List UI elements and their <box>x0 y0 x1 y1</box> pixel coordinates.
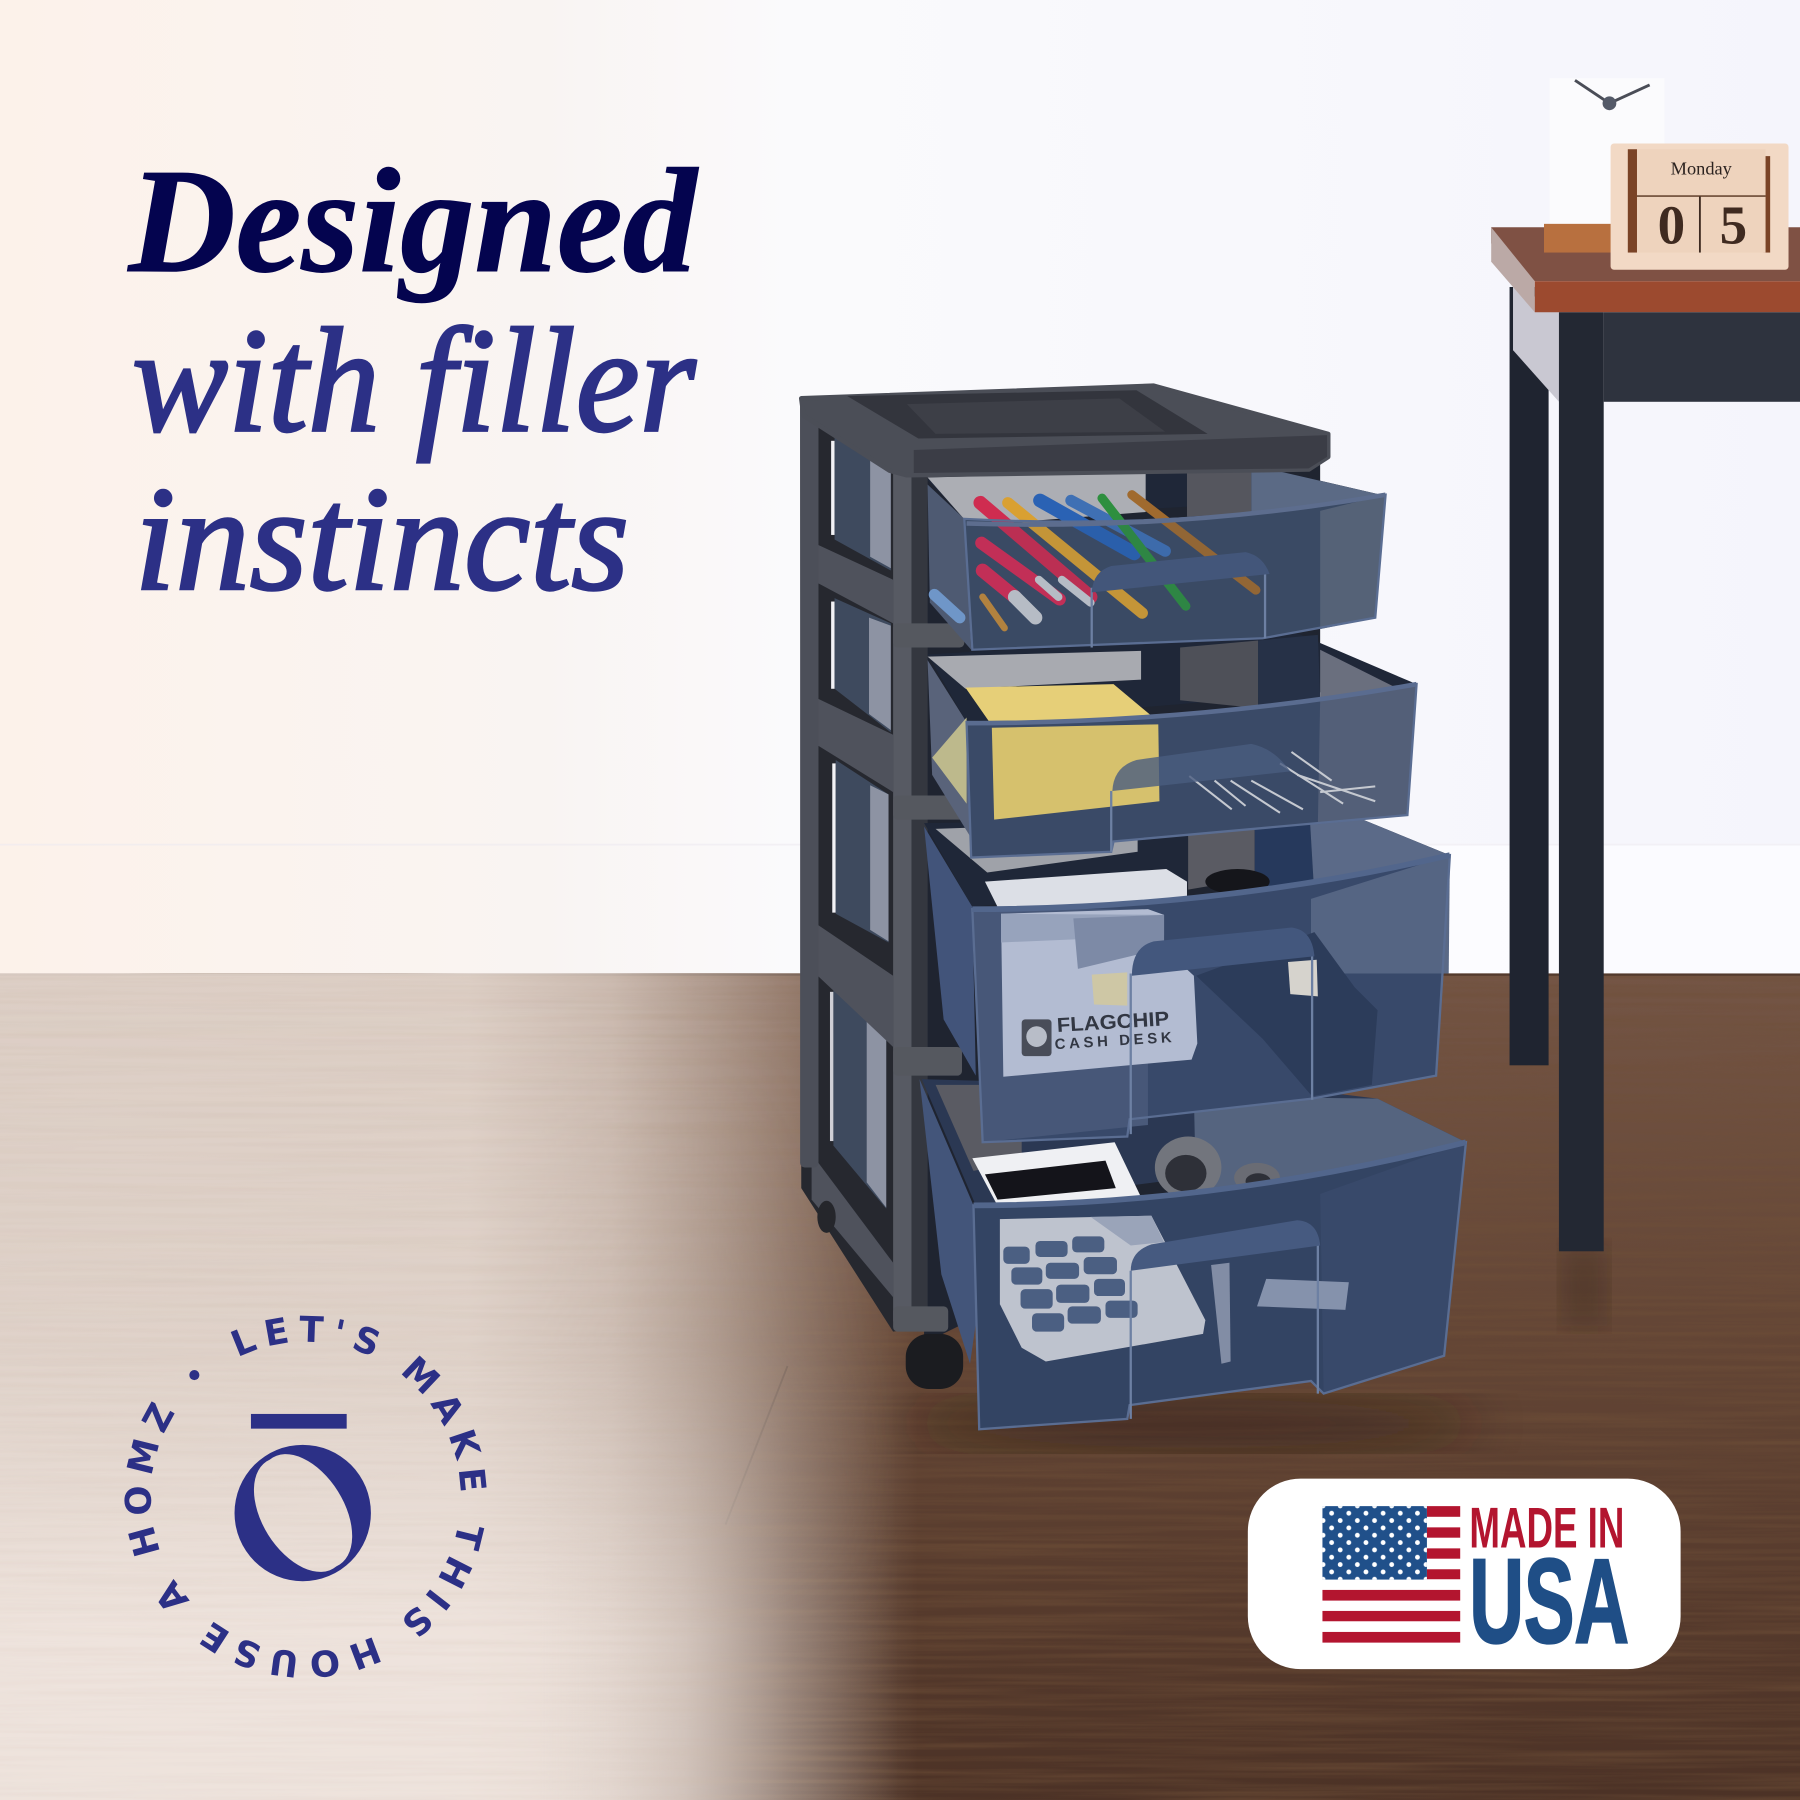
side panel 3 <box>832 760 889 942</box>
front post <box>893 472 928 1321</box>
paper clips <box>1189 752 1375 813</box>
side panel 4 <box>830 988 886 1209</box>
photo frame <box>972 1142 1142 1210</box>
drawer 4 handle <box>1131 1220 1320 1419</box>
device top <box>985 869 1187 911</box>
device label: CASH DESK <box>1054 1029 1172 1053</box>
background: wall <box>0 0 1800 976</box>
calculator <box>1000 1216 1205 1361</box>
calendar date digits: 0 <box>1658 194 1685 255</box>
floor shadows <box>907 1246 1607 1449</box>
table front edge <box>1535 281 1800 312</box>
table top surface <box>1491 227 1800 281</box>
caster wheels <box>817 1201 963 1389</box>
sticky note <box>1092 972 1127 1006</box>
drawer 3: flagship device <box>924 816 1450 1142</box>
table top side edge <box>1491 227 1535 312</box>
drawer 4 front backing <box>973 1142 1466 1429</box>
background: wood floor <box>0 973 1800 1800</box>
drawer 4: calculator and rolls <box>920 1079 1466 1429</box>
unit rear body <box>924 465 1320 1343</box>
table front leg <box>1559 312 1604 1251</box>
side panel 1 <box>831 437 891 571</box>
device label: FLAGCHIP <box>1056 1008 1170 1037</box>
drawer 3 side wall <box>924 827 976 1076</box>
left side frame <box>800 402 928 1332</box>
made in usa badge <box>1248 1479 1681 1669</box>
drawer 2 front backing <box>967 684 1417 858</box>
side rails <box>812 542 893 1297</box>
drawer 4 front face <box>973 1142 1466 1429</box>
drawer 3 handle <box>1131 928 1314 1134</box>
drawer 4 rim <box>973 1142 1466 1205</box>
wooden calendar <box>1611 143 1789 270</box>
drawer 1 side wall <box>928 484 971 650</box>
table back leg <box>1510 287 1549 1065</box>
pen and grey clip <box>1211 1263 1349 1364</box>
side panel 2 <box>831 598 891 732</box>
circular logo <box>124 1316 487 1678</box>
drawer 4 interior <box>922 1079 1466 1205</box>
drawer 1 front backing <box>964 495 1386 650</box>
calendar day: Monday <box>1671 158 1733 178</box>
drawer unit <box>800 386 1466 1429</box>
drawer 1 interior <box>928 465 1386 519</box>
flag <box>1322 1506 1460 1643</box>
drawer 2 side wall <box>928 660 971 838</box>
drawer 2: sticky notes and clips <box>928 634 1417 858</box>
device body <box>1001 909 1197 1077</box>
top cap <box>801 386 1328 475</box>
left post <box>800 404 818 1167</box>
drawer 2 interior <box>928 634 1417 722</box>
table apron <box>1604 312 1800 402</box>
drawer 1 front face <box>964 495 1386 650</box>
background: baseboard <box>0 844 1800 973</box>
drawer 2 rim <box>967 684 1417 723</box>
table side apron <box>1513 282 1559 402</box>
title line 3: instincts <box>134 457 629 622</box>
drawer 2 front face <box>967 684 1417 858</box>
wooden calendar: 5 <box>1720 194 1747 255</box>
clock <box>1544 78 1665 253</box>
side table <box>1491 227 1800 1251</box>
title line 2: with filler <box>132 298 697 463</box>
sticky notes front <box>992 724 1159 820</box>
drawer 3 front backing <box>972 855 1450 1142</box>
tape rolls <box>1155 1136 1280 1198</box>
shelf rails <box>893 623 964 1332</box>
device label <box>1022 1008 1172 1056</box>
logo circular text: LET'S MAKE THIS HOUSE A HOMZ <box>124 1316 487 1678</box>
logo ring <box>235 1445 371 1581</box>
drawer 3 front face <box>972 855 1450 1142</box>
title <box>127 139 699 622</box>
logo bar <box>251 1414 347 1429</box>
drawer 4 side wall <box>920 1079 976 1364</box>
drawer 1 rim <box>967 495 1386 525</box>
pens <box>934 495 1256 628</box>
usa text: USA <box>1469 1536 1629 1669</box>
drawer 3 interior <box>924 816 1450 907</box>
title line 1: Designed <box>127 139 699 304</box>
sticky notes top <box>965 684 1155 726</box>
drawer 3 rim <box>972 855 1450 909</box>
drawer 2 handle <box>1111 744 1290 852</box>
tape dispenser <box>1196 932 1378 1096</box>
drawer 1: pens <box>928 465 1386 650</box>
black roll <box>1205 869 1270 894</box>
logo dot <box>189 1370 199 1380</box>
made in text: MADE IN <box>1469 1496 1624 1560</box>
drawer 1 handle <box>1092 552 1270 647</box>
